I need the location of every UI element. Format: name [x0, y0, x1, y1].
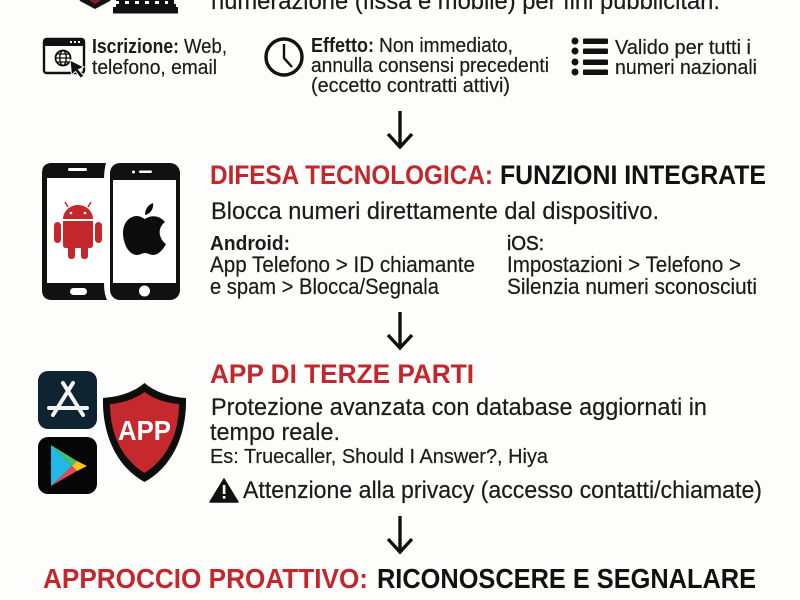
text: effetto: (eccetto contratti attivi) [311, 75, 510, 97]
text: effetto: Non immediato, [379, 35, 513, 57]
panel: registro delle opposizioni [44, 0, 757, 97]
text: iscrizione [92, 36, 227, 79]
text: ios steps: Impostazioni > Telefono > [507, 252, 741, 277]
icon: clock [266, 39, 302, 75]
text: iscrizione: Web, [184, 36, 227, 58]
text: esempi: Es: Truecaller, Should I Answer?, Hiya [210, 445, 549, 468]
text: iscrizione: telefono, email [92, 57, 217, 79]
heading: approccio proattivo: APPROCCIO PROATTIVO: [43, 563, 368, 594]
icon: android robot [54, 202, 102, 259]
icon: list [572, 38, 608, 76]
arrow: to approccio proattivo [388, 516, 412, 552]
text: android steps: e spam > Blocca/Segnala [210, 274, 439, 299]
text: iscrizione: Iscrizione: [92, 36, 179, 58]
text: effetto: annulla consensi precedenti [311, 55, 549, 77]
text: blocca numeri: Blocca numeri direttamente dal dispositivo. [211, 198, 659, 225]
text: protezione avanzata [210, 394, 707, 446]
text: effetto: Effetto: [311, 35, 374, 57]
text: ios steps: Silenzia numeri sconosciuti [507, 274, 757, 299]
text: ios steps: iOS: [507, 233, 544, 255]
icon: app store [38, 371, 97, 429]
icon: web window with cursor [44, 39, 84, 78]
heading: difesa tecnologica [210, 160, 766, 190]
heading: approccio proattivo: RICONOSCERE E SEGNALARE [377, 563, 756, 594]
text: android steps: App Telefono > ID chiamante [210, 252, 475, 277]
icon: red app shield [103, 383, 186, 482]
icon: warning triangle [210, 479, 238, 502]
heading: difesa tecnologica: FUNZIONI INTEGRATE [500, 160, 766, 190]
text: protezione avanzata: Protezione avanzata con database aggiornati in [211, 394, 707, 421]
text: protezione avanzata: tempo reale. [210, 419, 340, 446]
text: android steps [210, 233, 475, 299]
panel: app di terze parti [38, 359, 762, 504]
text: ios steps [507, 233, 757, 299]
arrow: to app di terze parti [388, 312, 412, 348]
text: effetto [311, 35, 549, 97]
icon: apple phone [110, 163, 180, 300]
heading: app di terze parti: APP DI TERZE PARTI [210, 359, 474, 389]
panel: difesa tecnologica [42, 160, 766, 300]
text: attenzione privacy: Attenzione alla privacy (accesso contatti/chiamate) [243, 477, 762, 504]
text: validita [615, 37, 757, 79]
heading: approccio proattivo [43, 563, 756, 594]
arrow: to difesa tecnologica [388, 111, 412, 147]
heading: difesa tecnologica: DIFESA TECNOLOGICA: [210, 160, 493, 190]
icon: red app shield: APP [118, 415, 171, 446]
text: validita: numeri nazionali [615, 57, 757, 79]
text: validita: Valido per tutti i [615, 37, 751, 59]
icon: apple logo [123, 203, 166, 255]
icon: android phone [42, 163, 107, 300]
icon: google play [38, 437, 97, 494]
icon: shield and institution building [76, 0, 178, 14]
text: android steps: Android: [210, 233, 290, 255]
